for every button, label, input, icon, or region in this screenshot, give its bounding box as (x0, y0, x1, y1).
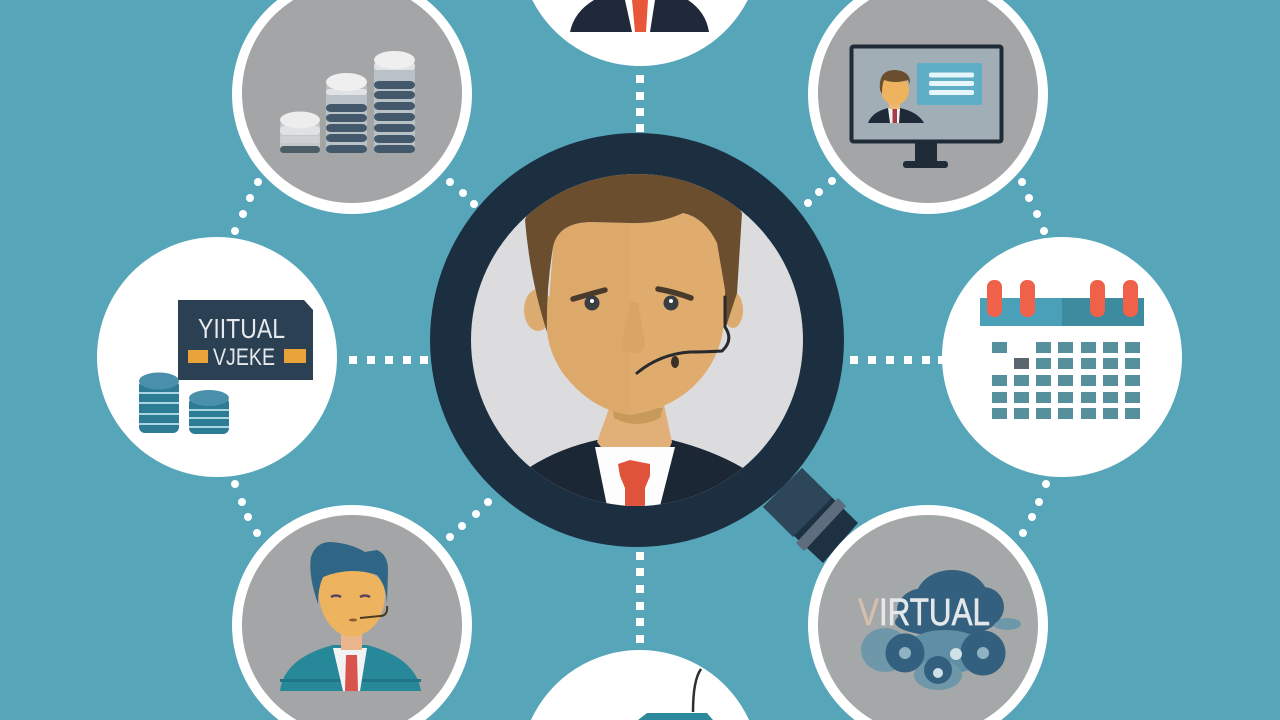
agent eyes (331, 596, 370, 597)
VIRTUAL word: VIRTUAL (858, 592, 990, 634)
nose (622, 302, 645, 353)
small coin stack (280, 112, 320, 153)
agent body (280, 645, 421, 691)
virtual card: VJEKE (213, 344, 275, 371)
teal coin stack right (189, 390, 229, 434)
magnifying glass handle (763, 468, 858, 563)
circle: calendar (942, 237, 1182, 477)
medium coin stack (326, 73, 367, 153)
dotted connectors (231, 75, 1050, 643)
man portrait (524, 174, 743, 506)
agent head (318, 570, 385, 636)
eyes (584, 296, 678, 310)
circle: monitor video call (808, 0, 1048, 214)
agent neck (341, 630, 362, 650)
circle: virtual cloud (808, 505, 1048, 720)
virtual card (178, 300, 313, 380)
lens background (471, 174, 803, 506)
circle: virtual card and coins (97, 237, 337, 477)
agent mouth (349, 618, 357, 622)
small man on screen (868, 70, 924, 123)
circle: coin stacks (232, 0, 472, 214)
suit (530, 440, 743, 506)
agent shirt and tie (333, 648, 367, 691)
headset cable (693, 669, 701, 712)
agent hair (310, 542, 388, 604)
device top (638, 713, 713, 720)
tall coin stack (374, 51, 415, 153)
top man suit (570, 0, 709, 32)
gears (888, 633, 1003, 684)
calendar rings (987, 280, 1138, 317)
circle: top man cropped (532, 0, 748, 66)
circle: bottom headset device cropped (531, 650, 749, 720)
headset wire and frown (637, 297, 729, 373)
hair (525, 173, 742, 332)
eyebrows (573, 289, 691, 299)
neck (597, 406, 672, 447)
ears (524, 289, 552, 331)
teal coin stack left (139, 372, 179, 433)
cloud (861, 570, 1021, 690)
monitor stand (903, 141, 948, 168)
circle: support agent (232, 505, 472, 720)
microphone (671, 356, 679, 368)
calendar day grid (992, 342, 1140, 419)
tie (618, 460, 650, 506)
monitor screen (852, 46, 1002, 142)
speech bubble (917, 63, 982, 105)
face (547, 222, 630, 415)
top man tie (632, 0, 648, 32)
virtual card: YIITUAL (198, 313, 285, 344)
magnifying glass with sad man (430, 133, 844, 547)
lens ring (430, 133, 844, 547)
calendar header (980, 298, 1144, 326)
shirt (595, 447, 675, 506)
agent headset (360, 606, 387, 618)
